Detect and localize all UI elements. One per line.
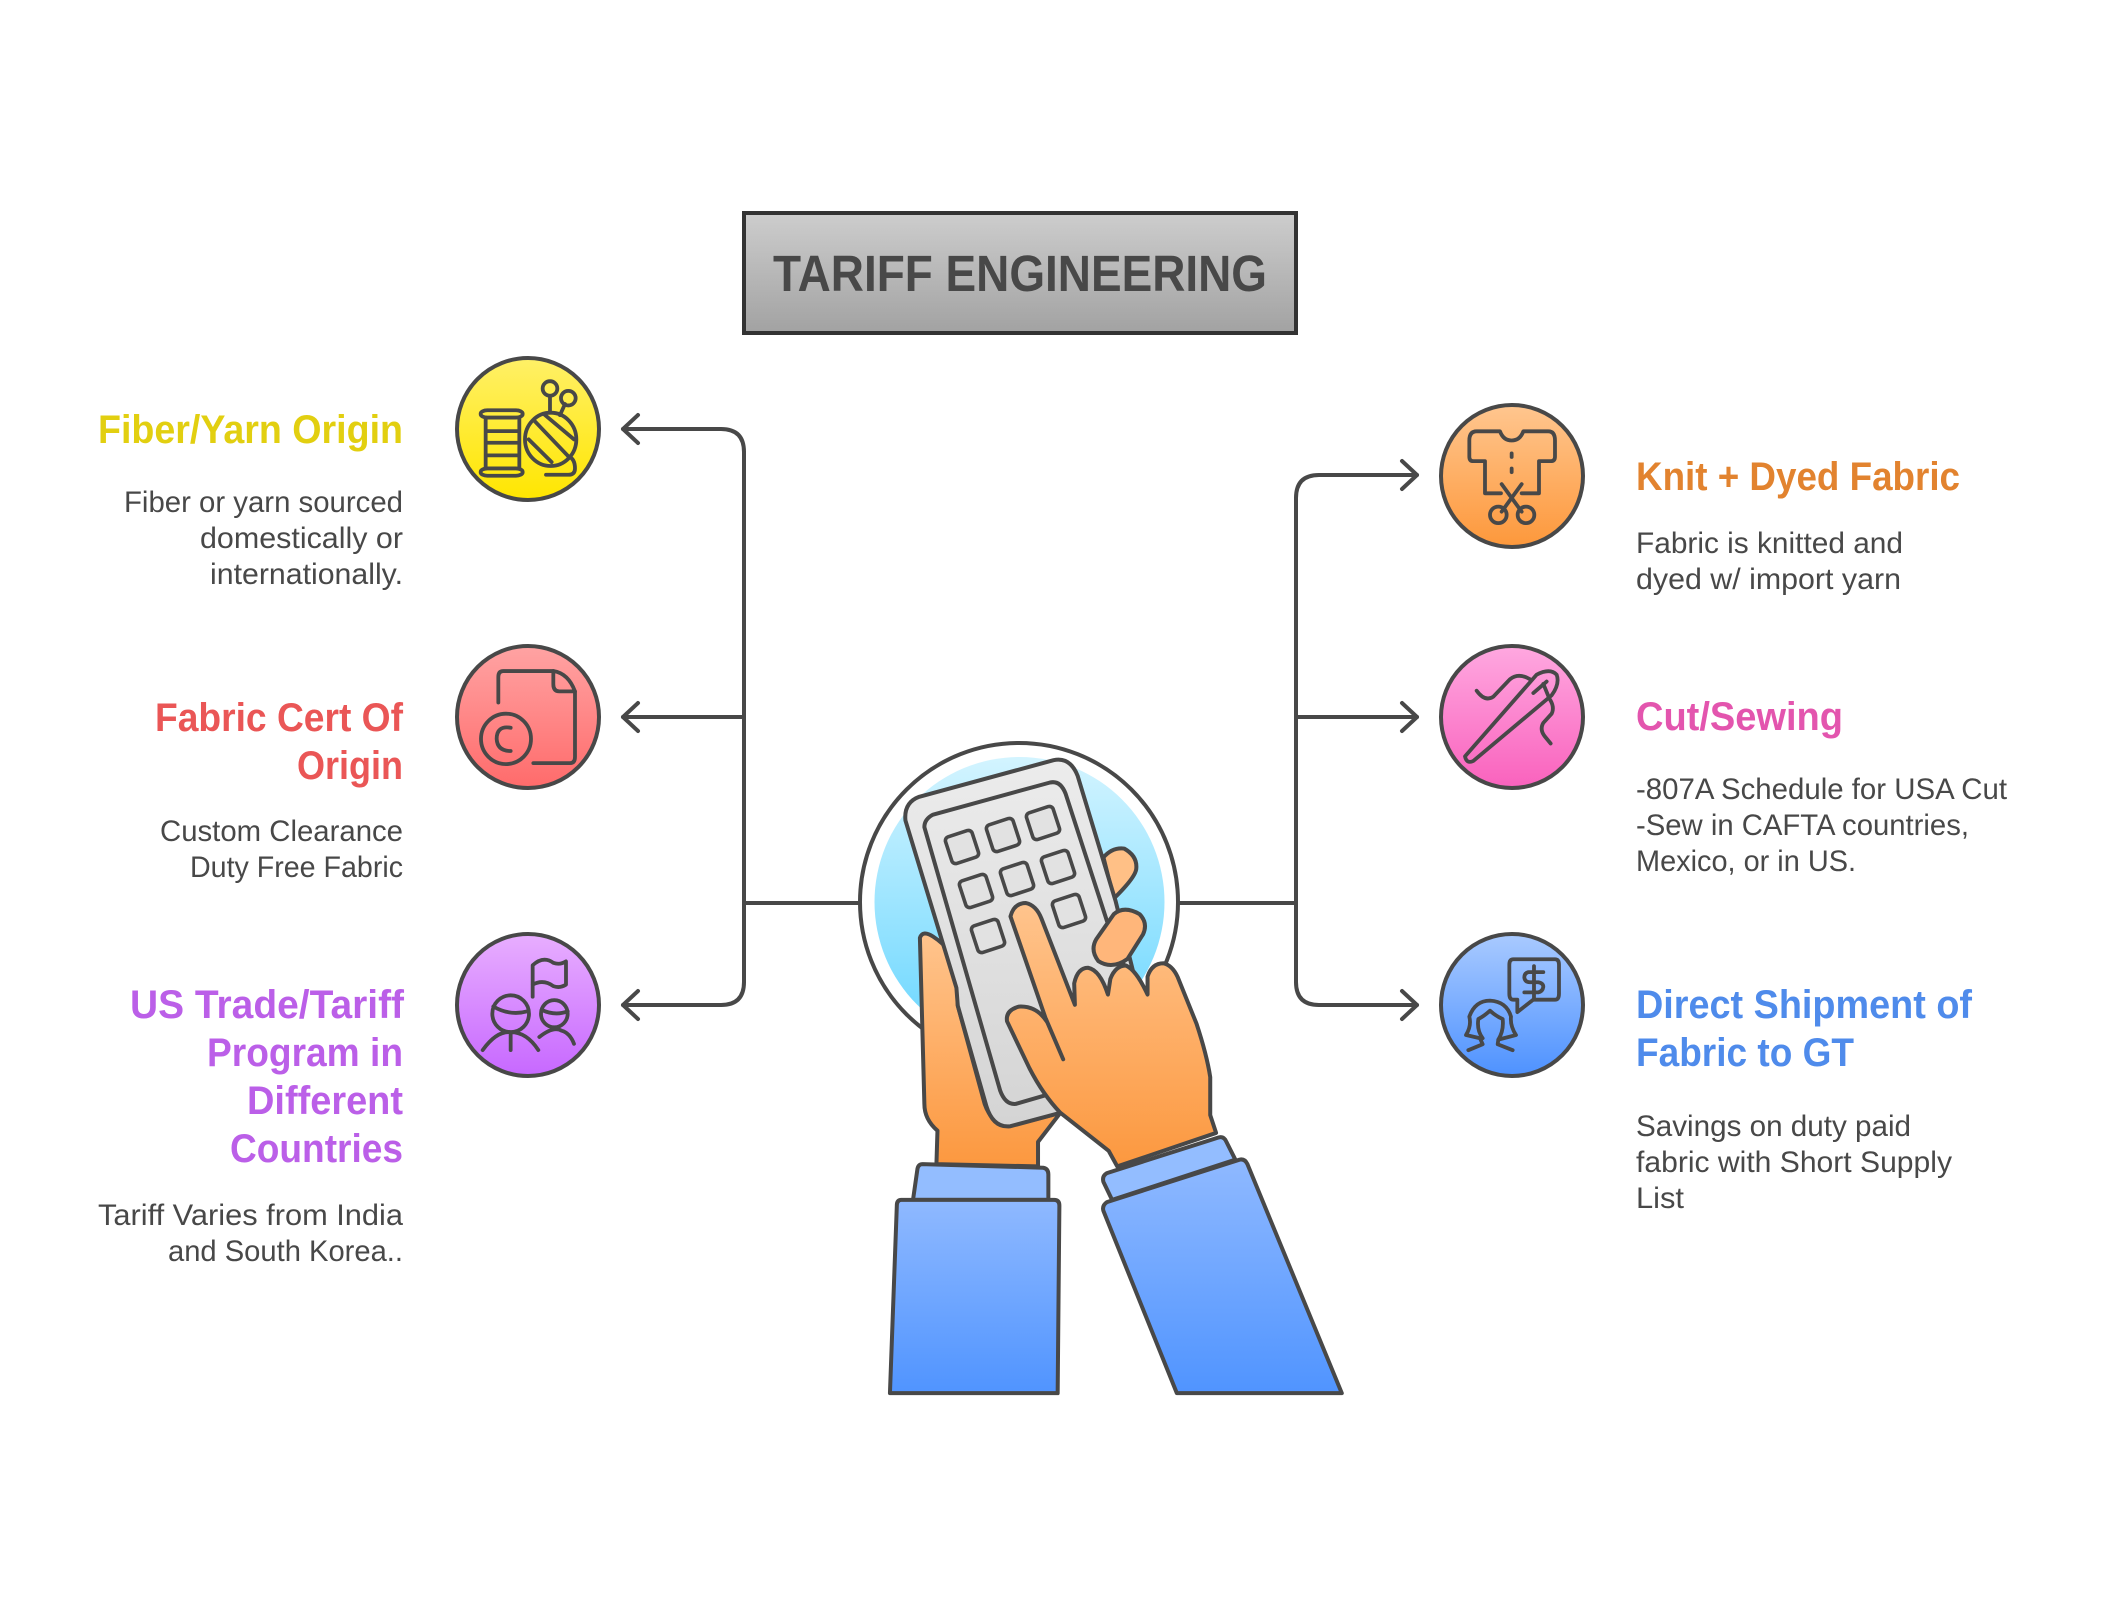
heading: US Trade/Tariff bbox=[130, 983, 405, 1027]
panel: Cut/Sewing bbox=[1441, 646, 2008, 878]
description bbox=[1636, 1110, 1952, 1215]
heading: Fabric to GT bbox=[1636, 1031, 1854, 1075]
heading bbox=[130, 983, 405, 1171]
icon: person with dollar speech bubble bbox=[1441, 934, 1583, 1076]
description: Savings on duty paid bbox=[1636, 1110, 1911, 1143]
icon: people and flag bbox=[457, 934, 599, 1076]
description: domestically or bbox=[200, 522, 403, 555]
description: and South Korea.. bbox=[168, 1235, 403, 1268]
heading bbox=[1636, 983, 1973, 1075]
heading: Fiber/Yarn Origin bbox=[98, 408, 403, 452]
panel: US Trade/Tariff Program bbox=[98, 934, 599, 1268]
description: Duty Free Fabric bbox=[190, 851, 403, 884]
icon: copyright document bbox=[457, 646, 599, 788]
description bbox=[124, 486, 403, 591]
description bbox=[98, 1199, 403, 1268]
heading: Fabric Cert Of bbox=[155, 696, 404, 740]
description: dyed w/ import yarn bbox=[1636, 563, 1901, 596]
description bbox=[1636, 773, 2008, 878]
description: internationally. bbox=[210, 558, 403, 591]
title bbox=[744, 213, 1296, 333]
description bbox=[1636, 527, 1903, 596]
panel: Fiber/Yarn Origin bbox=[98, 358, 599, 591]
panel: Direct Shipment of Fabric to GT bbox=[1441, 934, 1973, 1215]
panel: Knit + Dyed Fabric bbox=[1441, 405, 1960, 596]
icon: spool and yarn bbox=[457, 358, 599, 500]
panel: Fabric Cert Of Origin bbox=[155, 646, 599, 884]
description: -807A Schedule for USA Cut bbox=[1636, 773, 2008, 806]
icon: needle and thread bbox=[1441, 646, 1583, 788]
heading: Direct Shipment of bbox=[1636, 983, 1973, 1027]
connectors: right branch arrows bbox=[1179, 461, 1417, 1019]
description: Mexico, or in US. bbox=[1636, 845, 1856, 878]
central illustration: hands holding a calculator bbox=[860, 743, 1342, 1393]
description: List bbox=[1636, 1182, 1685, 1215]
heading: Different bbox=[247, 1079, 403, 1123]
heading: Countries bbox=[230, 1127, 403, 1171]
description: -Sew in CAFTA countries, bbox=[1636, 809, 1969, 842]
description: Fiber or yarn sourced bbox=[124, 486, 403, 519]
calculator keys bbox=[944, 805, 1087, 954]
description bbox=[160, 815, 403, 884]
title: TARIFF ENGINEERING bbox=[773, 245, 1267, 302]
heading bbox=[155, 696, 404, 788]
heading: Program in bbox=[207, 1031, 403, 1075]
description: Custom Clearance bbox=[160, 815, 403, 848]
heading: Cut/Sewing bbox=[1636, 695, 1843, 739]
icon: shirt and scissors bbox=[1441, 405, 1583, 547]
description: fabric with Short Supply bbox=[1636, 1146, 1952, 1179]
heading: Knit + Dyed Fabric bbox=[1636, 455, 1960, 499]
heading: Origin bbox=[297, 744, 403, 788]
description: Fabric is knitted and bbox=[1636, 527, 1903, 560]
connectors: left branch arrows bbox=[623, 415, 859, 1019]
description: Tariff Varies from India bbox=[98, 1199, 403, 1232]
